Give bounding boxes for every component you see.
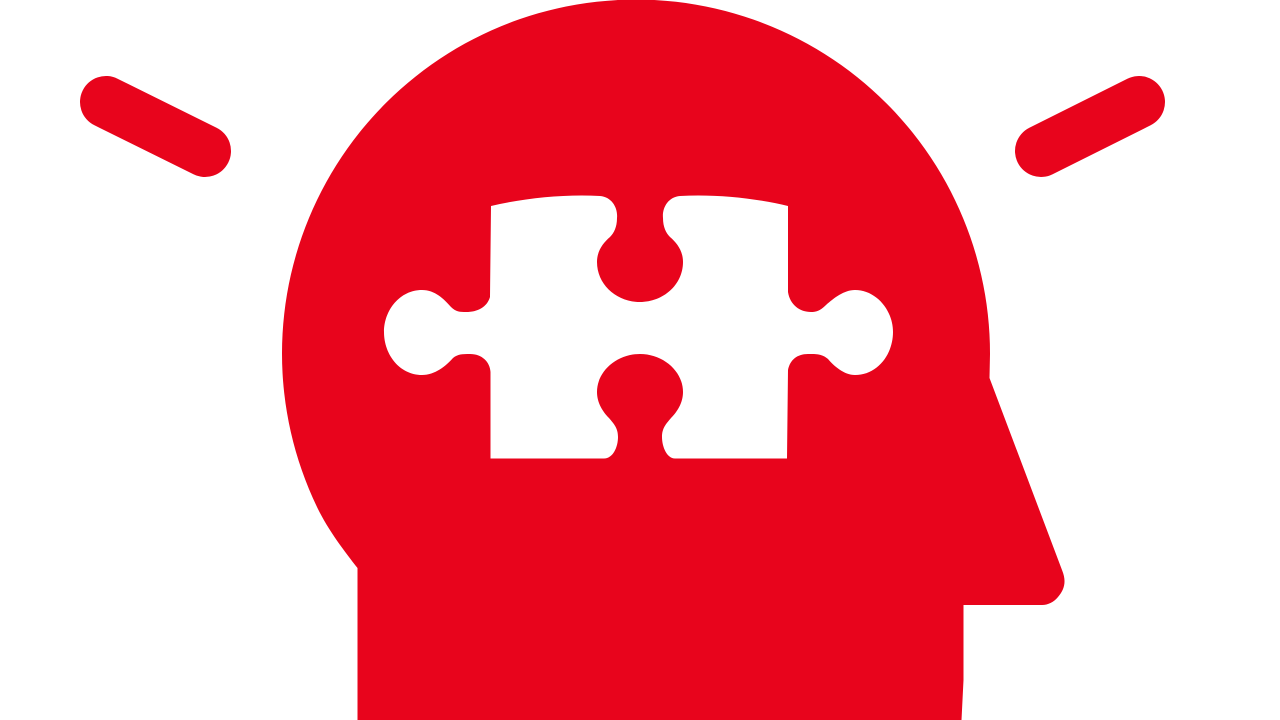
puzzle piece cut-out (384, 195, 893, 458)
icon: right alert dash (1041, 102, 1139, 151)
icon: left alert dash (106, 102, 205, 151)
head silhouette with puzzle cut-out (282, 0, 1065, 720)
